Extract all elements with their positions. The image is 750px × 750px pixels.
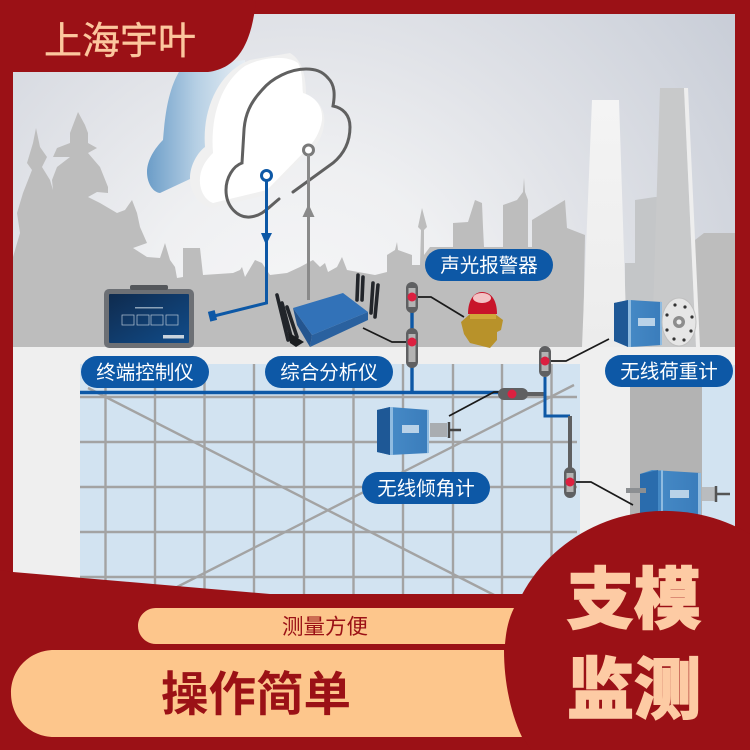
label: load sensor	[605, 355, 733, 387]
ground band	[13, 347, 735, 587]
scaffold grid	[80, 364, 577, 598]
icon: wireless load sensor box	[614, 298, 696, 347]
icon: strut sensor box	[626, 470, 730, 545]
tall rear building	[625, 197, 665, 347]
label: terminal controller	[81, 356, 209, 388]
chimney: right grey	[652, 88, 700, 347]
icon: alarm beacon	[461, 292, 503, 348]
black leader lines	[363, 297, 633, 505]
main feature pill	[11, 650, 522, 737]
chimney: left white	[582, 100, 627, 347]
icon: wireless tilt sensor box	[377, 407, 461, 455]
label: tilt sensor	[362, 472, 490, 504]
label: load sensor: 无线荷重计	[620, 361, 718, 383]
upper feature pill: 测量方便	[282, 615, 368, 639]
label: alarm	[425, 249, 553, 281]
cloud: white body	[200, 58, 322, 203]
sky background	[13, 13, 735, 353]
circle heading	[567, 563, 701, 728]
icon: terminal tablet	[104, 285, 194, 348]
main blue cable	[80, 312, 500, 392]
measured zone: blue floor	[80, 364, 580, 596]
icon: analyser router	[277, 275, 378, 347]
label: analyser: 综合分析仪	[280, 362, 378, 384]
upper feature pill	[138, 608, 514, 644]
label: tilt sensor: 无线倾角计	[377, 478, 475, 500]
cloud: white halo	[190, 53, 324, 208]
connector pills with red nodes	[406, 282, 576, 498]
cloud: blue shadow	[147, 60, 245, 193]
brand title: 上海宇叶	[44, 21, 196, 63]
circle heading: 监测	[567, 653, 701, 728]
grey uplink wire with arrow	[302, 145, 314, 300]
silhouette: trees and city skyline	[13, 112, 735, 347]
circle heading: 支模	[567, 563, 701, 638]
label: analyser	[265, 356, 393, 388]
label: alarm: 声光报警器	[440, 255, 538, 277]
cloud: outline	[226, 69, 350, 217]
column: right grey and blue strip	[630, 365, 735, 545]
blue downlink wire with arrow	[208, 170, 272, 322]
label: terminal controller: 终端控制仪	[96, 362, 194, 384]
main feature pill: 操作简单	[161, 669, 351, 722]
